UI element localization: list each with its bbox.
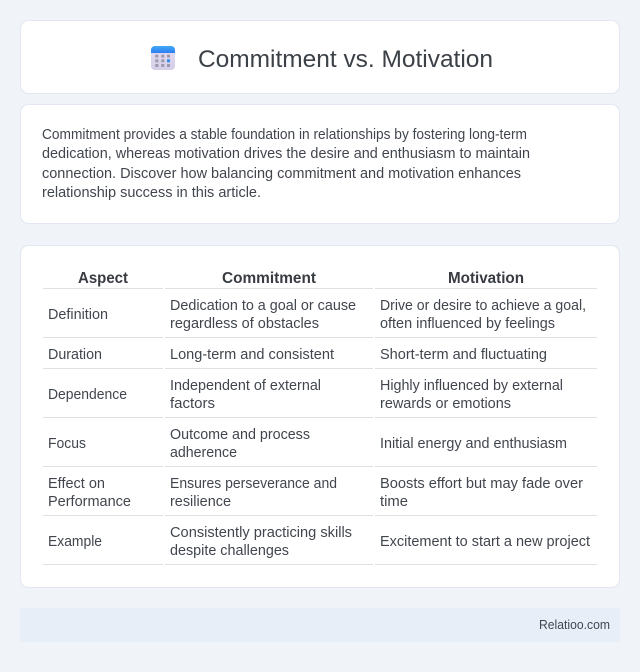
intro panel bbox=[20, 104, 620, 224]
row: effect on performance: Boosts effort but may fade over bbox=[380, 476, 583, 492]
row: example: Consistently practicing skills bbox=[170, 525, 352, 541]
row: dependence: Dependence bbox=[48, 387, 127, 403]
intro text: Commitment provides a stable foundation in relationships by fostering long-term bbox=[42, 127, 527, 143]
row: definition: Definition bbox=[48, 307, 108, 323]
row: focus: Initial energy and enthusiasm bbox=[380, 436, 567, 452]
header panel bbox=[20, 20, 620, 94]
row: dependence: factors bbox=[170, 396, 215, 412]
row: focus: Focus bbox=[48, 436, 86, 452]
intro text: dedication, whereas motivation drives the desire and enthusiasm to maintain bbox=[42, 146, 530, 162]
row: effect on performance: Performance bbox=[48, 494, 131, 510]
table header row: Commitment bbox=[222, 270, 317, 287]
intro text bbox=[42, 127, 530, 201]
row: focus: Outcome and process bbox=[170, 427, 310, 443]
row: example: despite challenges bbox=[170, 543, 289, 559]
row: duration: Duration bbox=[48, 347, 102, 363]
row: focus: adherence bbox=[170, 445, 237, 461]
row: example: Example bbox=[48, 534, 102, 550]
row: effect on performance bbox=[48, 476, 583, 510]
row: definition bbox=[48, 298, 586, 332]
row: focus bbox=[48, 427, 567, 461]
row: definition: often influenced by feelings bbox=[380, 316, 555, 332]
table header row: Motivation bbox=[448, 270, 524, 287]
row: effect on performance: resilience bbox=[170, 494, 231, 510]
table panel bbox=[20, 246, 620, 588]
row: effect on performance: Ensures perseverance and bbox=[170, 476, 337, 492]
row: dependence: rewards or emotions bbox=[380, 396, 511, 412]
row: duration: Long-term and consistent bbox=[170, 347, 334, 363]
row: example: Excitement to start a new project bbox=[380, 534, 590, 550]
row: example bbox=[48, 525, 590, 559]
intro text: connection. Discover how balancing commitment and motivation enhances bbox=[42, 166, 521, 182]
icon: calendar bbox=[151, 46, 175, 70]
row: dependence: Highly influenced by external bbox=[380, 378, 563, 394]
row: definition: Drive or desire to achieve a goal, bbox=[380, 298, 586, 314]
row: duration: Short-term and fluctuating bbox=[380, 347, 547, 363]
row: effect on performance: Effect on bbox=[48, 476, 105, 492]
row: dependence bbox=[48, 378, 563, 412]
row: duration bbox=[48, 347, 547, 363]
table header row: Aspect bbox=[78, 270, 129, 287]
title: Commitment vs. Motivation bbox=[198, 46, 493, 73]
table header row bbox=[78, 270, 524, 287]
row: definition: Dedication to a goal or cause bbox=[170, 298, 356, 314]
row: effect on performance: time bbox=[380, 494, 408, 510]
intro text: relationship success in this article. bbox=[42, 185, 261, 201]
footer brand text: Relatioo.com bbox=[539, 618, 610, 632]
row: dependence: Independent of external bbox=[170, 378, 321, 394]
footer bbox=[20, 608, 620, 642]
row: definition: regardless of obstacles bbox=[170, 316, 319, 332]
